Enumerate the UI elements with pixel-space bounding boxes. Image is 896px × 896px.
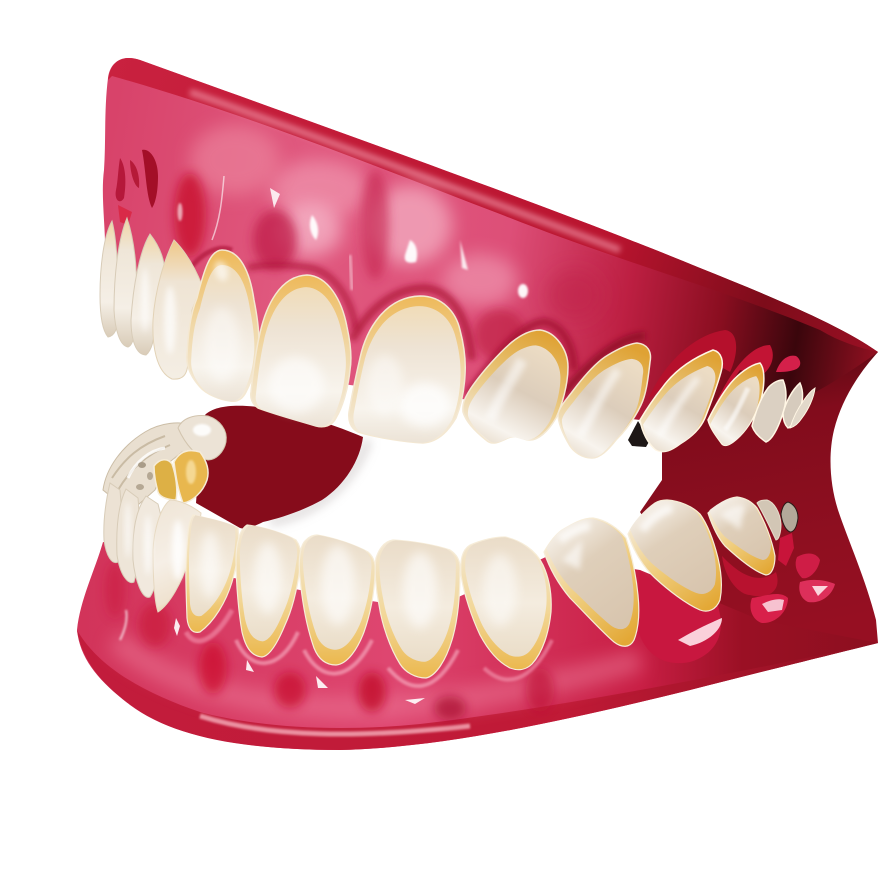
upper gum rim [108, 58, 878, 352]
upper teeth [100, 218, 815, 458]
enamel highlights on upper teeth [141, 261, 748, 436]
far lower molars [103, 416, 226, 512]
right gum mass [636, 570, 721, 663]
upper gum [100, 58, 878, 420]
gold molars [174, 451, 208, 503]
gum specular highlights [310, 215, 318, 240]
enamel highlights on lower teeth [125, 502, 745, 628]
gum pockets [142, 150, 158, 208]
right wall of mouth [640, 330, 878, 670]
lower gum [77, 533, 878, 750]
lower gum shading [105, 533, 835, 720]
pink arcs under teeth [186, 610, 232, 641]
lower rim highlight [200, 716, 470, 734]
dark tissue behind teeth [196, 406, 363, 529]
small gum bump [776, 356, 800, 372]
soft shadows on background [270, 440, 854, 590]
dark gap between teeth [628, 421, 650, 447]
lower gum rim [77, 630, 878, 750]
specular highlights on gum [174, 618, 180, 636]
red gum crescents at back teeth [648, 330, 736, 400]
rim highlight [190, 92, 620, 250]
gum soft highlights and shadows [116, 125, 800, 405]
lower teeth [104, 483, 798, 678]
